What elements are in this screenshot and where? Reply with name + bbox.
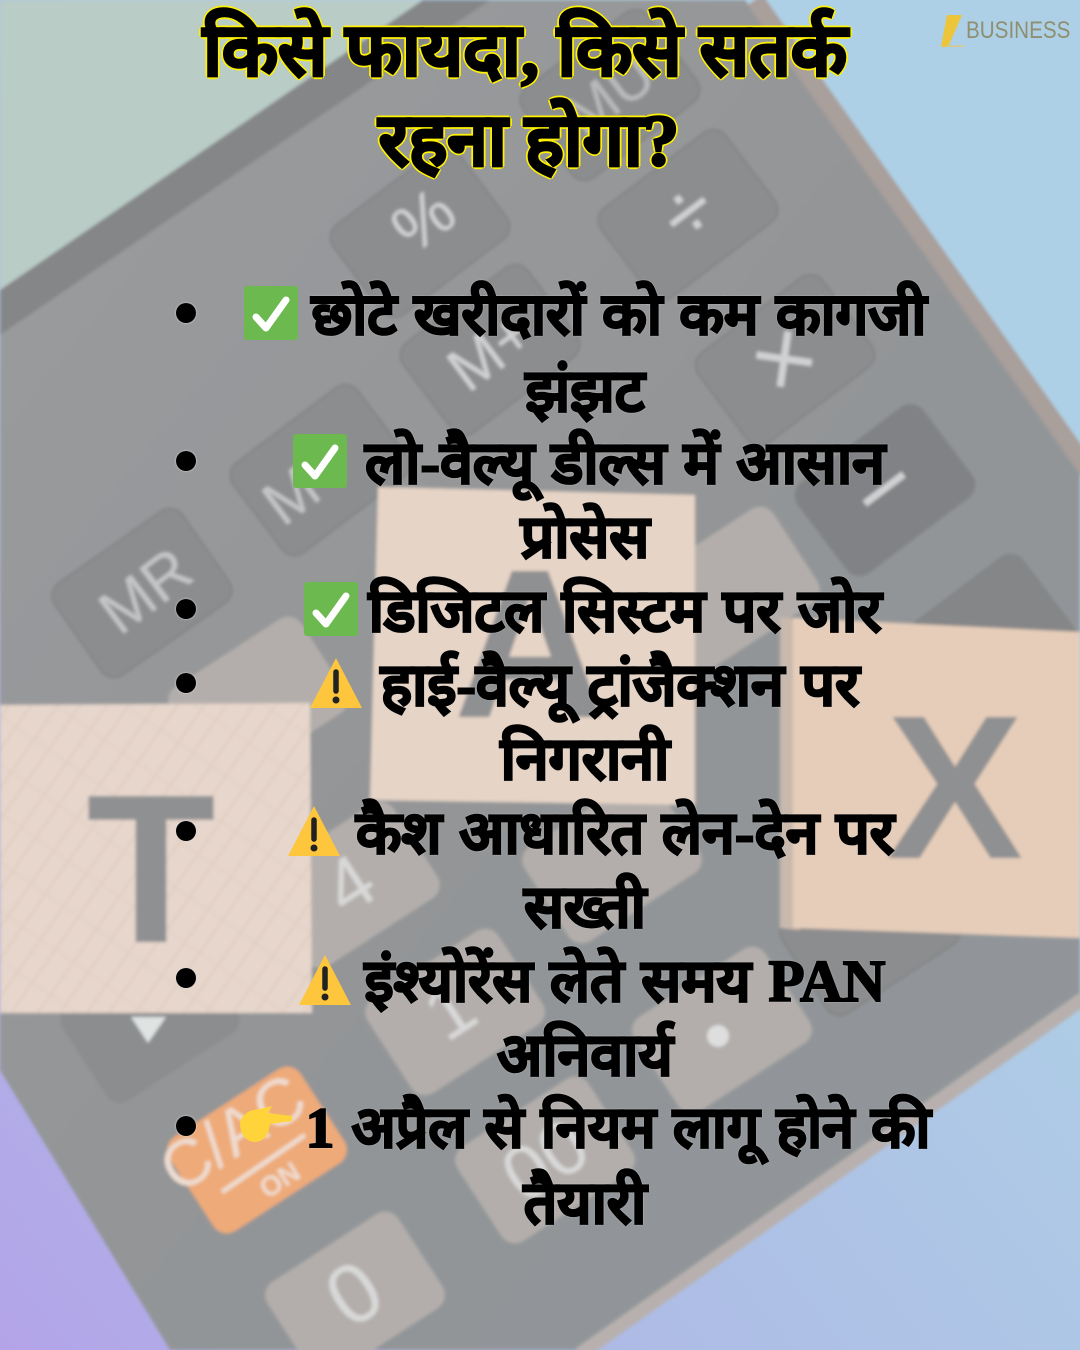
background: calculator photo with TAX tiles: M+: [435, 297, 547, 405]
title: रहना होगा?: [379, 100, 679, 181]
item 2: लो-वैल्यू डील्स में आसान: [365, 430, 885, 496]
background: calculator photo with TAX tiles: 4: [309, 837, 391, 932]
background: calculator photo with TAX tiles: MU: [552, 40, 667, 149]
icon: check: [293, 434, 347, 488]
icon: warning: [288, 806, 340, 856]
bullet 7: [176, 1116, 196, 1136]
item 4: हाई-वैल्यू ट्रांजैक्शन पर: [381, 652, 859, 718]
bullet 6: [176, 968, 196, 988]
wood tiles: [370, 487, 695, 805]
logo: Z Business: [941, 15, 1070, 47]
title: किसे फायदा, किसे सतर्क: [203, 10, 847, 91]
list: प्रोसेस: [521, 504, 649, 570]
bullet 3: [176, 599, 196, 619]
background: calculator photo with TAX tiles: X: [887, 673, 1023, 902]
background: calculator photo with TAX tiles: 00: [487, 1102, 604, 1219]
list: तैयारी: [524, 1170, 646, 1236]
bullet 1: [176, 303, 196, 323]
background: calculator photo with TAX tiles: ÷: [640, 159, 735, 264]
list: सख्ती: [524, 874, 646, 940]
background: calculator photo with TAX tiles: T: [86, 750, 216, 987]
list: अनिवार्य: [497, 1022, 673, 1088]
orange key: [161, 1061, 353, 1239]
bullet 5: [176, 821, 196, 841]
background: calculator photo with TAX tiles: 0: [309, 1241, 399, 1345]
list: निगरानी: [501, 726, 669, 792]
icon: warning: [310, 658, 362, 708]
background: calculator photo with TAX tiles: %: [377, 172, 469, 267]
bullet 2: [176, 451, 196, 471]
icon: pointing hand: [240, 1106, 292, 1142]
item 3: डिजिटल सिस्टम पर जोर: [369, 578, 881, 644]
icon: check: [244, 286, 298, 340]
background: calculator photo with TAX tiles: −: [827, 426, 941, 551]
background: calculator photo with TAX tiles: ×: [727, 296, 841, 421]
dark keys: [46, 3, 1080, 1021]
list: [174, 280, 934, 1236]
bullet 4: [176, 673, 196, 693]
item 6: इंश्योरेंस लेते समय PAN: [365, 948, 885, 1014]
light keys: [162, 501, 826, 1350]
background: calculator photo with TAX tiles: ON: [254, 1156, 306, 1204]
background: calculator photo with TAX tiles: 1: [409, 963, 491, 1058]
item 7: 1 अप्रैल से नियम लागू होने की: [306, 1097, 930, 1160]
background: calculator photo with TAX tiles: MR: [87, 535, 205, 648]
logo: Z Business: BUSINESS: [966, 17, 1070, 44]
background: calculator photo with TAX tiles: M-: [250, 440, 349, 539]
background: calculator photo with TAX tiles: C/AC: [146, 1059, 319, 1207]
title: [198, 6, 852, 181]
background: calculator photo with TAX tiles: A: [453, 525, 607, 762]
item 5: कैश आधारित लेन-देन पर: [356, 800, 894, 866]
item 1: छोटे खरीदारों को कम कागजी: [312, 282, 926, 347]
icon: warning: [299, 955, 351, 1005]
icon: check: [304, 582, 358, 636]
list: झंझट: [526, 358, 644, 424]
